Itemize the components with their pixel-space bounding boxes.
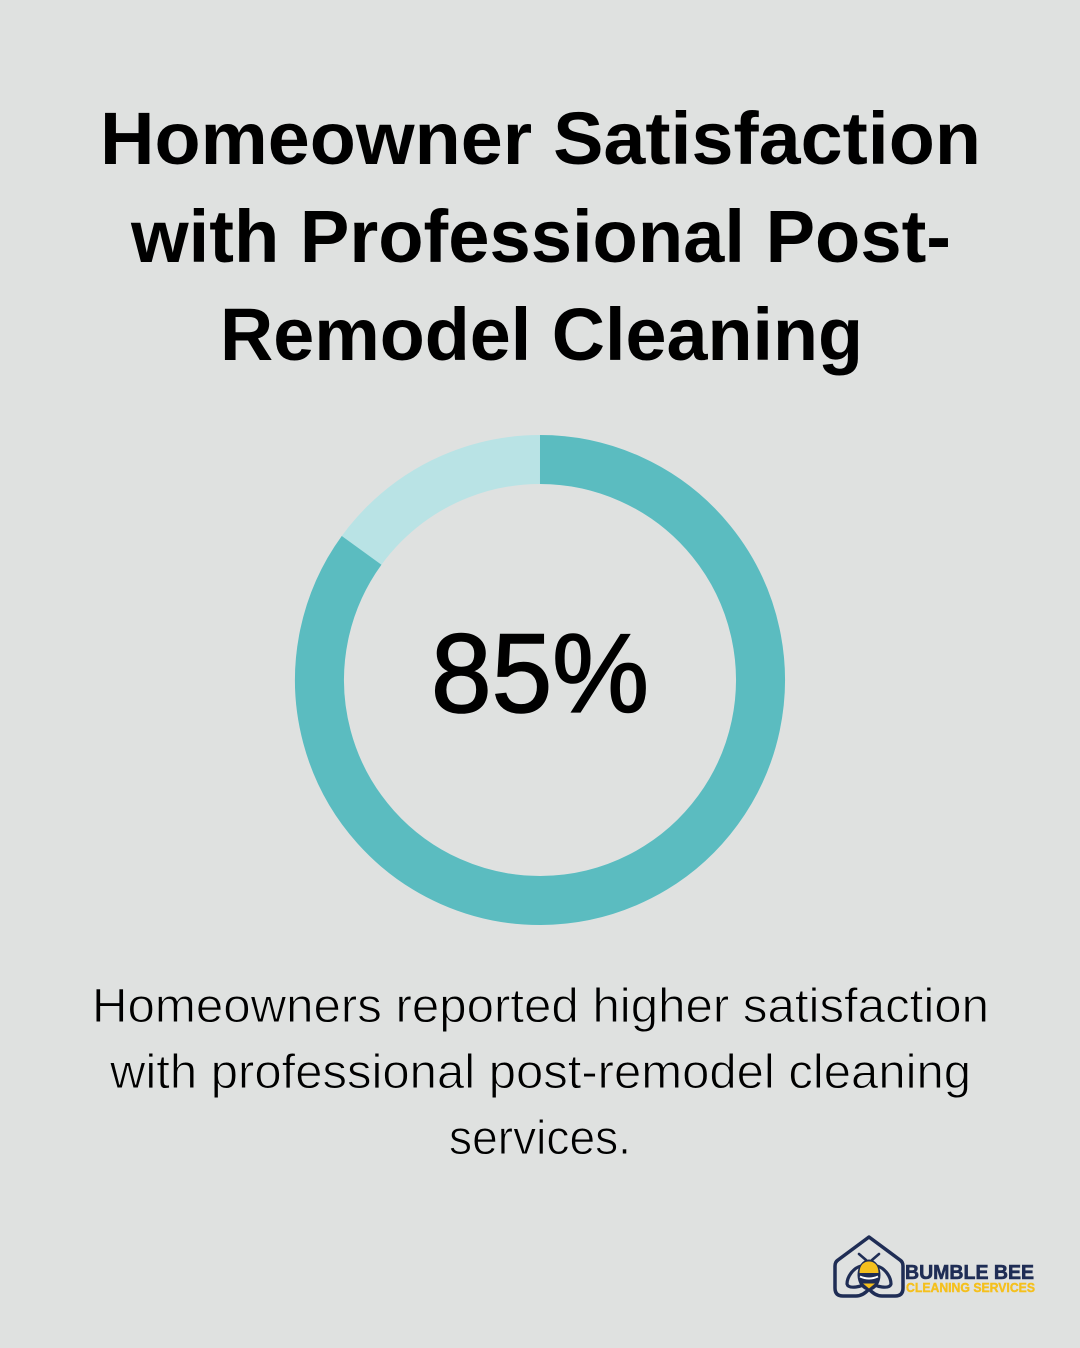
description text: services. — [449, 1112, 631, 1165]
chart segment: 85% — [319, 460, 760, 900]
title: with Professional Post- — [130, 195, 951, 278]
title — [100, 97, 981, 376]
title: Remodel Cleaning — [220, 293, 863, 376]
logo wordmark: BUMBLE BEE — [905, 1262, 1034, 1284]
description text — [92, 980, 989, 1165]
title: Homeowner Satisfaction — [100, 97, 981, 180]
icon: house outline with bee — [835, 1237, 903, 1296]
description text: Homeowners reported higher satisfaction — [92, 980, 989, 1033]
donut chart: 85% — [319, 460, 760, 900]
statistic: 85%: 85% — [431, 611, 649, 736]
logo tagline: CLEANING SERVICES — [906, 1281, 1035, 1295]
chart track: remaining 15% — [320, 460, 760, 900]
logo: Bumble Bee Cleaning Services — [835, 1237, 1035, 1296]
description text: with professional post-remodel cleaning — [109, 1046, 971, 1099]
